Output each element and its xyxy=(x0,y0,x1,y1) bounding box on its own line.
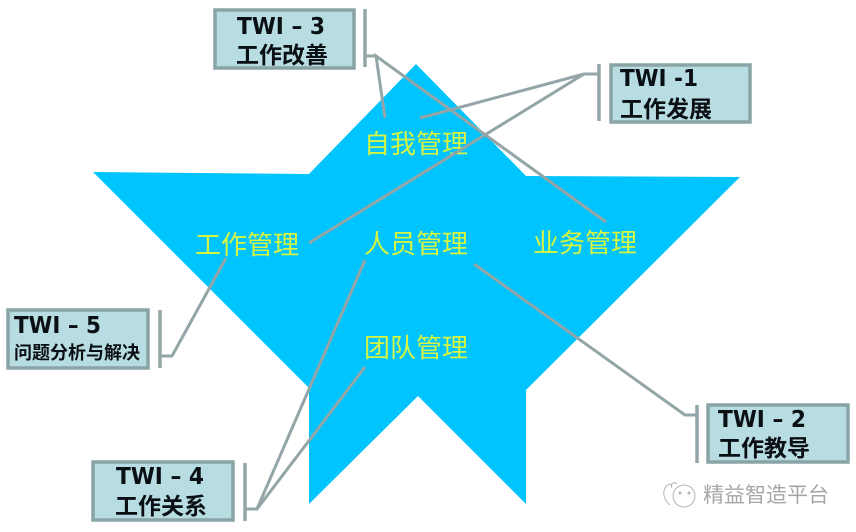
connector: TWI-3 xyxy=(366,56,606,222)
star shape xyxy=(93,64,740,504)
callout: TWI-2: TWI – 2 xyxy=(718,407,806,433)
bracket: TWI-5 xyxy=(158,310,162,368)
icon: chat bubbles xyxy=(664,483,695,507)
callout: TWI-1: 工作发展 xyxy=(620,96,712,122)
callout: TWI-5: 问题分析与解决 xyxy=(14,343,140,363)
callout: TWI-1 xyxy=(611,65,750,122)
callout: TWI-3: TWI – 3 xyxy=(237,14,325,40)
callout: TWI-4: TWI – 4 xyxy=(116,464,204,490)
callout: TWI-4 xyxy=(93,462,233,520)
connector: TWI-2 xyxy=(474,264,697,415)
connector: TWI-1 xyxy=(309,74,598,243)
label: work management: 工作管理 xyxy=(195,230,299,260)
callout: TWI-2: 工作教导 xyxy=(718,435,810,461)
label: business management: 业务管理 xyxy=(533,228,637,258)
callout: TWI-1: TWI -1 xyxy=(620,66,698,92)
callout: TWI-2 xyxy=(708,405,848,462)
callout: TWI-3 xyxy=(215,10,354,68)
label: people management: 人员管理 xyxy=(364,229,468,259)
connector: TWI-4 xyxy=(245,260,365,509)
bracket: TWI-3 xyxy=(363,9,367,67)
bracket: TWI-4 xyxy=(243,463,247,521)
bracket: TWI-1 xyxy=(597,64,601,121)
watermark text: 精益智造平台 xyxy=(703,484,829,507)
connector: TWI-5 xyxy=(160,258,226,356)
label: team management: 团队管理 xyxy=(364,333,468,363)
callout: TWI-5: TWI – 5 xyxy=(14,313,101,339)
label: self management: 自我管理 xyxy=(364,129,468,159)
callout: TWI-5 xyxy=(8,310,148,368)
bracket: TWI-2 xyxy=(695,405,699,463)
callout: TWI-4: 工作关系 xyxy=(115,493,207,519)
callout: TWI-3: 工作改善 xyxy=(236,42,328,68)
